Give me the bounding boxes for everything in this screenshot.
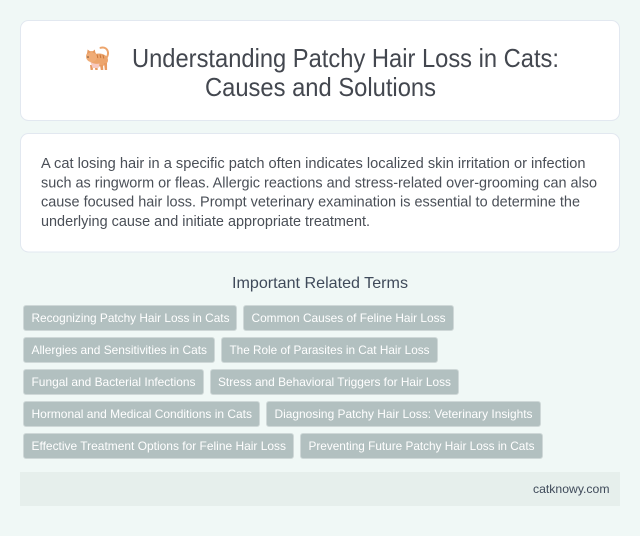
tag (244, 306, 454, 330)
tag (300, 434, 542, 458)
text block: summary: such as ringworm or fleas. Allergic reactions and stress-related over-grooming can also (41, 175, 597, 191)
text block: summary (41, 156, 597, 230)
tag: Fungal and Bacterial Infections (32, 375, 196, 389)
tag: The Role of Parasites in Cat Hair Loss (230, 343, 430, 357)
tag (24, 338, 214, 362)
tag: Effective Treatment Options for Feline Hair Loss (32, 439, 286, 453)
tag: Stress and Behavioral Triggers for Hair Loss (218, 375, 451, 389)
panel: title card (20, 20, 620, 120)
tag (266, 402, 540, 426)
tag (24, 370, 204, 394)
text block: summary: A cat losing hair in a specific patch often indicates localized skin irritation or infection (41, 156, 586, 172)
footer (20, 472, 620, 506)
icon: cat (86, 47, 108, 70)
tag list (24, 306, 542, 458)
tag: Common Causes of Feline Hair Loss (252, 311, 446, 325)
tag: Preventing Future Patchy Hair Loss in Cats (308, 439, 534, 453)
title: Causes and Solutions (205, 74, 436, 102)
tag (222, 338, 438, 362)
tag (24, 402, 260, 426)
title: Understanding Patchy Hair Loss in Cats: (132, 45, 559, 73)
heading: related terms: Important Related Terms (232, 275, 408, 292)
footer source: catknowy.com (533, 482, 610, 496)
title (132, 45, 559, 102)
tag (24, 434, 294, 458)
text block: summary: underlying cause and initiate appropriate treatment. (41, 214, 370, 230)
tag: Allergies and Sensitivities in Cats (32, 343, 207, 357)
tag: Diagnosing Patchy Hair Loss: Veterinary Insights (274, 407, 532, 421)
tag: Hormonal and Medical Conditions in Cats (32, 407, 252, 421)
text block: summary: cause focused hair loss. Prompt veterinary examination is essential to determine the (41, 194, 580, 210)
tag (24, 306, 236, 330)
panel: summary paragraph (20, 134, 620, 252)
tag (210, 370, 458, 394)
tag: Recognizing Patchy Hair Loss in Cats (32, 311, 230, 325)
